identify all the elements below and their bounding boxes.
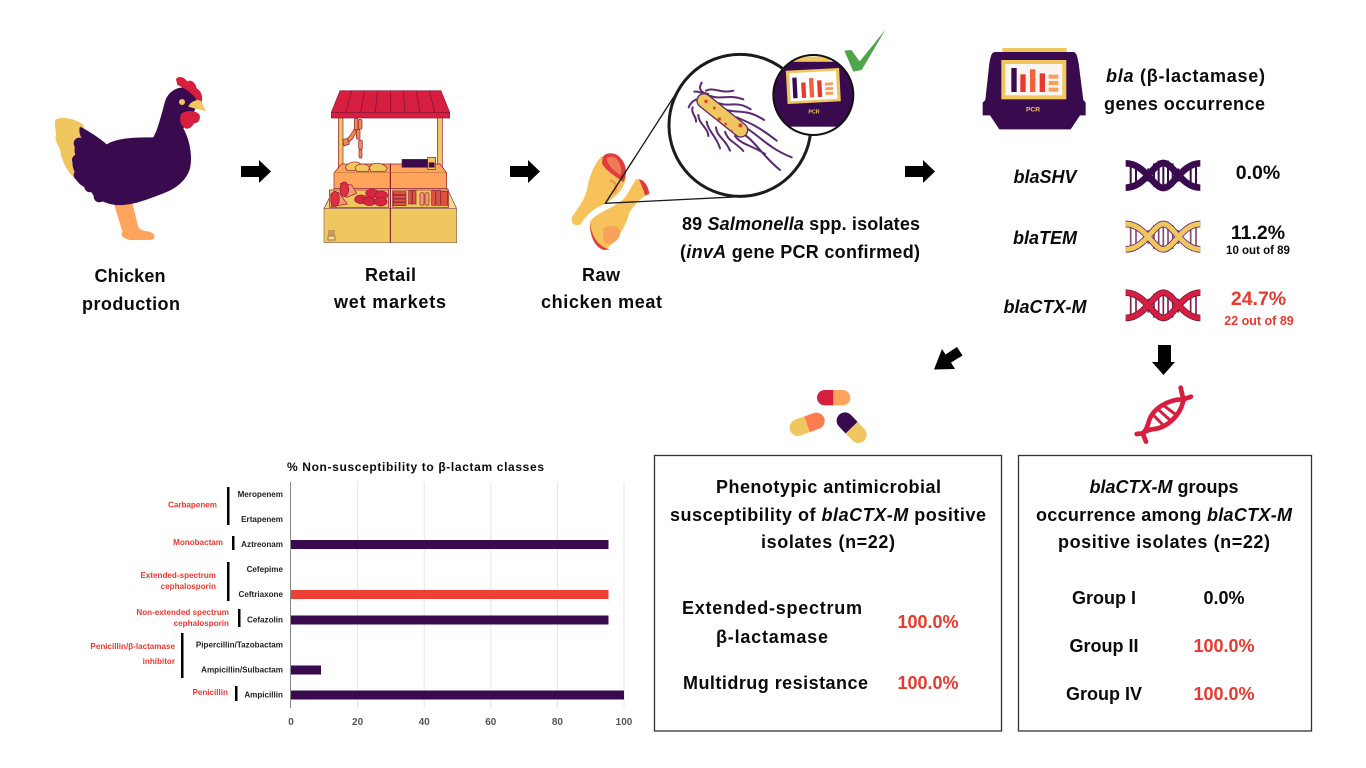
drug labels: Meropenem	[238, 490, 283, 499]
heading: groups panel: positive isolates (n=22)	[1058, 532, 1270, 552]
class labels	[90, 500, 229, 697]
icon: purple DNA	[1126, 161, 1200, 189]
class labels: Non-extended spectrum	[136, 608, 229, 617]
drug labels	[196, 490, 283, 700]
text: Salmonella isolates: (invA gene PCR confirmed)	[680, 242, 920, 262]
x axis ticks	[288, 717, 633, 728]
icon: green check mark	[844, 29, 886, 72]
row: extended-spectrum	[682, 598, 959, 647]
row: group I: Group I	[1072, 588, 1136, 608]
class labels: Penicillin/β-lactamase	[90, 642, 175, 651]
label: retail wet markets: Retail	[365, 265, 416, 285]
label: raw chicken meat: Raw	[582, 265, 621, 285]
chart title: % Non-susceptibility to β-lactam classes	[287, 460, 544, 474]
row: multidrug resistance	[683, 673, 959, 693]
icon: chicken	[55, 77, 206, 240]
row: group I: 0.0%	[1203, 588, 1245, 608]
class brackets	[181, 487, 240, 701]
x axis ticks: 80	[552, 717, 563, 728]
row: blaTEM	[1013, 222, 1290, 257]
row: group IV: 100.0%	[1193, 684, 1255, 704]
x axis ticks: 100	[616, 717, 633, 728]
arrow: down-left to phenotypic panel	[934, 347, 962, 370]
drug labels: Cefazolin	[247, 616, 283, 624]
row: blaSHV: blaSHV	[1013, 167, 1078, 187]
drug labels: Aztreonam	[241, 540, 283, 549]
row: blaCTX-M: 22 out of 89	[1224, 314, 1294, 328]
class labels: inhibitor	[143, 657, 176, 666]
row: group II	[1070, 636, 1255, 656]
panel: phenotypic susceptibility	[654, 456, 1002, 731]
icon: PCR machine: PCR	[1026, 107, 1040, 114]
arrow: production to markets	[241, 160, 271, 183]
heading: groups panel: occurrence among blaCTX-M	[1036, 505, 1293, 525]
row: blaCTX-M	[1004, 288, 1294, 328]
row: group I	[1072, 588, 1245, 608]
bar chart: non-susceptibility	[90, 460, 633, 728]
row: blaSHV	[1013, 161, 1280, 189]
drug labels: Ceftriaxone	[238, 590, 283, 599]
x axis ticks: 60	[485, 717, 497, 728]
drug labels: Cefepime	[247, 565, 283, 574]
label: chicken production	[82, 266, 180, 314]
class labels: Monobactam	[173, 538, 223, 547]
icon: PCR machine	[983, 48, 1086, 129]
icon: yellow DNA	[1126, 223, 1200, 251]
bars	[291, 540, 624, 700]
heading: phenotypic panel: susceptibility of blaCTX-M positive	[670, 505, 986, 525]
x axis ticks: 20	[352, 717, 364, 728]
icon: market stall	[324, 91, 457, 243]
heading: bla genes occurrence: genes occurrence	[1104, 94, 1265, 114]
icon: bacterium	[689, 83, 792, 170]
heading: phenotypic panel: Phenotypic antimicrobial	[716, 477, 941, 497]
label: raw chicken meat: chicken meat	[541, 292, 662, 312]
row: group II: Group II	[1070, 636, 1138, 656]
heading: phenotypic panel: isolates (n=22)	[761, 532, 895, 552]
row: blaCTX-M: 24.7%	[1231, 288, 1286, 310]
heading: bla genes occurrence	[1104, 66, 1265, 114]
class labels: Carbapenem	[168, 500, 217, 510]
row: multidrug resistance: 100.0%	[897, 673, 959, 693]
icon: red DNA	[1126, 291, 1200, 320]
row: group IV: Group IV	[1066, 684, 1142, 704]
arrow: down to group panel	[1152, 345, 1175, 375]
row: extended-spectrum: β-lactamase	[716, 627, 828, 647]
icon: red DNA helix	[1137, 388, 1191, 442]
label: chicken production: production	[82, 294, 180, 314]
heading: phenotypic panel	[670, 477, 986, 552]
row: multidrug resistance: Multidrug resistance	[683, 673, 868, 693]
label: retail wet markets	[333, 265, 446, 312]
class labels: cephalosporin	[161, 582, 216, 591]
row: group II: 100.0%	[1193, 636, 1255, 656]
row: blaTEM: blaTEM	[1013, 228, 1078, 248]
icon: raw chicken meat with magnifier and PCR	[572, 29, 886, 250]
arrow: markets to meat	[510, 160, 540, 183]
row: blaTEM: 10 out of 89	[1226, 245, 1290, 257]
heading: groups panel	[1036, 477, 1293, 552]
label: retail wet markets: wet markets	[333, 292, 446, 312]
magnifier cone	[605, 95, 740, 203]
icon: PCR inset: PCR	[808, 110, 820, 116]
x axis ticks: 40	[419, 717, 430, 728]
row: extended-spectrum: 100.0%	[897, 612, 959, 632]
class labels: Extended-spectrum	[140, 571, 216, 580]
row: group IV	[1066, 684, 1255, 704]
row: blaTEM: 11.2%	[1231, 222, 1285, 244]
magnifier circle	[669, 54, 811, 196]
row: blaSHV: 0.0%	[1236, 162, 1280, 184]
row: blaCTX-M: blaCTX-M	[1004, 297, 1088, 317]
drug labels: Ampicillin	[244, 690, 283, 700]
panel: blaCTX-M groups	[1018, 456, 1312, 731]
text: Salmonella isolates	[680, 214, 920, 262]
icon: chicken drumsticks	[572, 153, 649, 250]
label: chicken production: Chicken	[94, 266, 166, 286]
drug labels: Ertapenem	[241, 515, 283, 524]
row: extended-spectrum: Extended-spectrum	[682, 598, 862, 618]
drug labels: Pipercillin/Tazobactam	[196, 640, 283, 650]
class labels: cephalosporin	[174, 619, 229, 628]
icon: PCR inset	[770, 55, 857, 135]
x axis ticks: 0	[288, 717, 294, 728]
icon: capsules	[787, 390, 870, 446]
text: Salmonella isolates: 89 Salmonella spp. isolates	[682, 214, 920, 234]
heading: bla genes occurrence: bla (β-lactamase)	[1106, 66, 1265, 86]
label: raw chicken meat	[541, 265, 662, 312]
class labels: Penicillin	[192, 688, 228, 697]
arrow: isolates to PCR	[905, 160, 935, 183]
heading: groups panel: blaCTX-M groups	[1090, 477, 1238, 497]
drug labels: Ampicillin/Sulbactam	[201, 666, 283, 674]
